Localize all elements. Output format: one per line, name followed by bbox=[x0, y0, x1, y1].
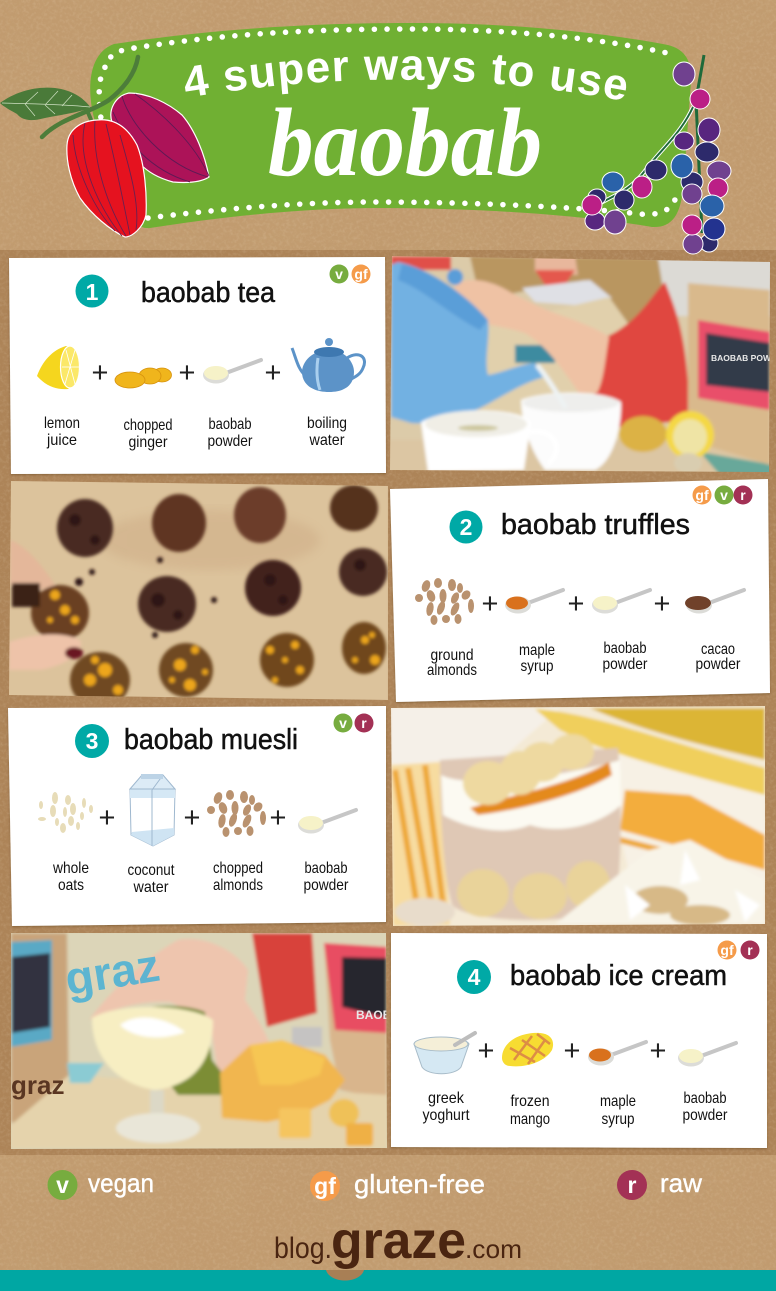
heading: baobab tea: baobab tea bbox=[141, 277, 276, 309]
ingredient labels: greek bbox=[428, 1090, 465, 1107]
icon: baobab powder spoon bbox=[678, 1043, 736, 1066]
heading: baobab truffles: baobab truffles bbox=[501, 509, 690, 541]
ingredient labels: powder bbox=[208, 433, 253, 450]
icon: lemon bbox=[37, 346, 80, 389]
footer logo: blog.graze.com: .com bbox=[465, 1234, 522, 1264]
diet badges: gluten-free and raw bbox=[718, 940, 760, 960]
plus: + bbox=[568, 588, 584, 620]
legend: gluten-free: gluten-free bbox=[354, 1169, 485, 1199]
icon: maple syrup spoon bbox=[588, 1042, 646, 1066]
ingredient labels: whole bbox=[52, 860, 89, 877]
photo label: baobab pack: BAOBA bbox=[356, 1008, 400, 1022]
diet badges: vegan and raw: v bbox=[339, 715, 347, 731]
legend: gluten-free: gf bbox=[314, 1173, 336, 1199]
ingredient labels: lemon bbox=[44, 415, 80, 432]
legend: vegan: v bbox=[56, 1172, 69, 1198]
icon: cacao powder spoon bbox=[685, 590, 744, 614]
ingredient labels: baobab bbox=[304, 860, 348, 877]
ingredient labels: water bbox=[133, 879, 169, 896]
footer teal bar bbox=[0, 1270, 776, 1291]
panel: recipe 4 card, baobab ice cream bbox=[391, 933, 767, 1148]
green title banner bbox=[90, 23, 691, 228]
footer logo: blog.graze.com: blog. bbox=[274, 1232, 332, 1265]
footer logo: blog.graze.com: graze bbox=[331, 1212, 466, 1270]
legend: vegan bbox=[48, 1168, 154, 1200]
legend: raw: raw bbox=[660, 1168, 702, 1198]
ingredient labels: frozen bbox=[510, 1093, 550, 1110]
ingredient labels: ginger bbox=[128, 434, 168, 451]
plus: + bbox=[92, 357, 108, 389]
step number 1: 1 bbox=[86, 279, 99, 305]
ingredient labels: maple bbox=[600, 1093, 636, 1110]
diet badges: vegan and gluten-free: v bbox=[335, 266, 343, 282]
ingredient labels: syrup bbox=[602, 1111, 635, 1128]
ingredient labels: ground bbox=[430, 647, 474, 664]
diet badges: gluten-free and raw: gf bbox=[720, 942, 734, 958]
icon: baobab powder spoon bbox=[203, 360, 261, 384]
ingredient labels: cacao bbox=[701, 641, 735, 658]
plus: + bbox=[184, 802, 200, 834]
ingredient labels: almonds bbox=[213, 877, 263, 894]
plus: + bbox=[179, 357, 195, 389]
step number 2 bbox=[450, 510, 482, 544]
ingredient labels bbox=[427, 640, 741, 679]
legend: vegan: vegan bbox=[88, 1168, 154, 1198]
icon: ginger slices bbox=[115, 368, 172, 388]
ingredient labels: mango bbox=[510, 1111, 550, 1128]
diet badges: vegan and gluten-free bbox=[330, 264, 370, 284]
ingredient labels: powder bbox=[696, 656, 741, 673]
ingredient labels: yoghurt bbox=[422, 1107, 470, 1124]
icon: whole oats bbox=[38, 792, 93, 833]
step number 4: 4 bbox=[468, 964, 481, 990]
illustration: cacao pods and leaf bbox=[0, 57, 209, 237]
heading: baobab muesli: baobab muesli bbox=[124, 724, 298, 756]
plus: + bbox=[650, 1035, 666, 1067]
title word: baobab: baobab bbox=[268, 89, 542, 196]
diet badges: vegan and raw: r bbox=[361, 715, 367, 731]
icon: baobab powder spoon bbox=[298, 810, 356, 834]
photo: pouring tea bbox=[385, 250, 776, 475]
diet badges: gluten-free, vegan, raw: v bbox=[720, 487, 728, 503]
ingredient labels: baobab bbox=[604, 640, 647, 657]
ingredient labels: coconut bbox=[128, 862, 175, 879]
icon: coconut water carton bbox=[130, 774, 175, 846]
title line: 4 super ways to use bbox=[184, 55, 626, 100]
photo: mango and ice cream bbox=[8, 930, 400, 1152]
icon: chopped almonds bbox=[207, 790, 266, 837]
icon: blue teapot bbox=[292, 338, 365, 392]
heading: baobab ice cream: baobab ice cream bbox=[510, 960, 727, 992]
step number 1 bbox=[76, 274, 108, 308]
icon: frozen mango bbox=[502, 1033, 553, 1066]
ingredient labels: maple bbox=[519, 642, 555, 659]
plus: + bbox=[478, 1035, 494, 1067]
plus: + bbox=[564, 1035, 580, 1067]
diet badges: gluten-free, vegan, raw: r bbox=[740, 487, 746, 503]
ingredient labels: chopped bbox=[124, 417, 172, 434]
plus: + bbox=[654, 588, 670, 620]
step number 4 bbox=[457, 960, 491, 994]
diet badges: gluten-free, vegan, raw bbox=[692, 486, 752, 504]
diet badges: vegan and raw bbox=[334, 714, 374, 732]
step number 3: 3 bbox=[86, 728, 98, 754]
title line: 4 super ways to use: 4 super ways to use bbox=[184, 55, 626, 100]
photo label: graze pack: graz bbox=[11, 1070, 64, 1100]
icon: ground almonds bbox=[415, 578, 474, 625]
plus: + bbox=[265, 357, 281, 389]
ingredient labels: oats bbox=[58, 877, 84, 894]
plus: + bbox=[99, 802, 115, 834]
ingredient labels: baobab bbox=[208, 416, 252, 433]
legend: raw bbox=[617, 1168, 702, 1200]
ingredient labels: syrup bbox=[520, 658, 554, 675]
plus: + bbox=[270, 802, 286, 834]
photo: baobab truffles on baking paper bbox=[5, 478, 390, 708]
step number 2: 2 bbox=[460, 514, 472, 540]
ingredient labels: water bbox=[309, 432, 345, 449]
panel: recipe 2 card, baobab truffles bbox=[390, 479, 770, 702]
icon: greek yoghurt pot bbox=[414, 1033, 475, 1074]
legend: gluten-free bbox=[310, 1169, 485, 1201]
icon: baobab powder spoon bbox=[592, 590, 650, 614]
ingredient labels bbox=[422, 1090, 728, 1128]
illustration: berry branch bbox=[582, 55, 731, 254]
ingredient labels: baobab bbox=[684, 1090, 727, 1107]
diet badges: vegan and gluten-free: gf bbox=[354, 266, 368, 282]
ingredient labels: powder bbox=[602, 656, 648, 673]
legend: raw: r bbox=[628, 1172, 637, 1198]
panel: recipe 1 card, baobab tea bbox=[9, 257, 386, 474]
panel: recipe 3 card, baobab muesli bbox=[8, 706, 386, 926]
ingredient labels: powder bbox=[682, 1107, 728, 1124]
ingredient labels: powder bbox=[304, 877, 349, 894]
icon: maple syrup spoon bbox=[505, 590, 563, 614]
ingredient labels bbox=[44, 415, 347, 451]
photo: baobab muesli jar bbox=[388, 704, 768, 928]
ingredient labels: chopped bbox=[213, 860, 263, 877]
ingredient labels: juice bbox=[46, 432, 77, 449]
ingredient labels bbox=[52, 860, 349, 896]
diet badges: gluten-free and raw: r bbox=[747, 942, 753, 958]
ingredient labels: almonds bbox=[427, 662, 477, 679]
footer logo: blog.graze.com bbox=[274, 1212, 522, 1280]
plus: + bbox=[482, 588, 498, 620]
step number 3 bbox=[75, 724, 109, 758]
photo label: graze apron: graz bbox=[61, 939, 163, 1005]
ingredient labels: boiling bbox=[307, 415, 347, 432]
diet badges: gluten-free, vegan, raw: gf bbox=[695, 487, 709, 503]
